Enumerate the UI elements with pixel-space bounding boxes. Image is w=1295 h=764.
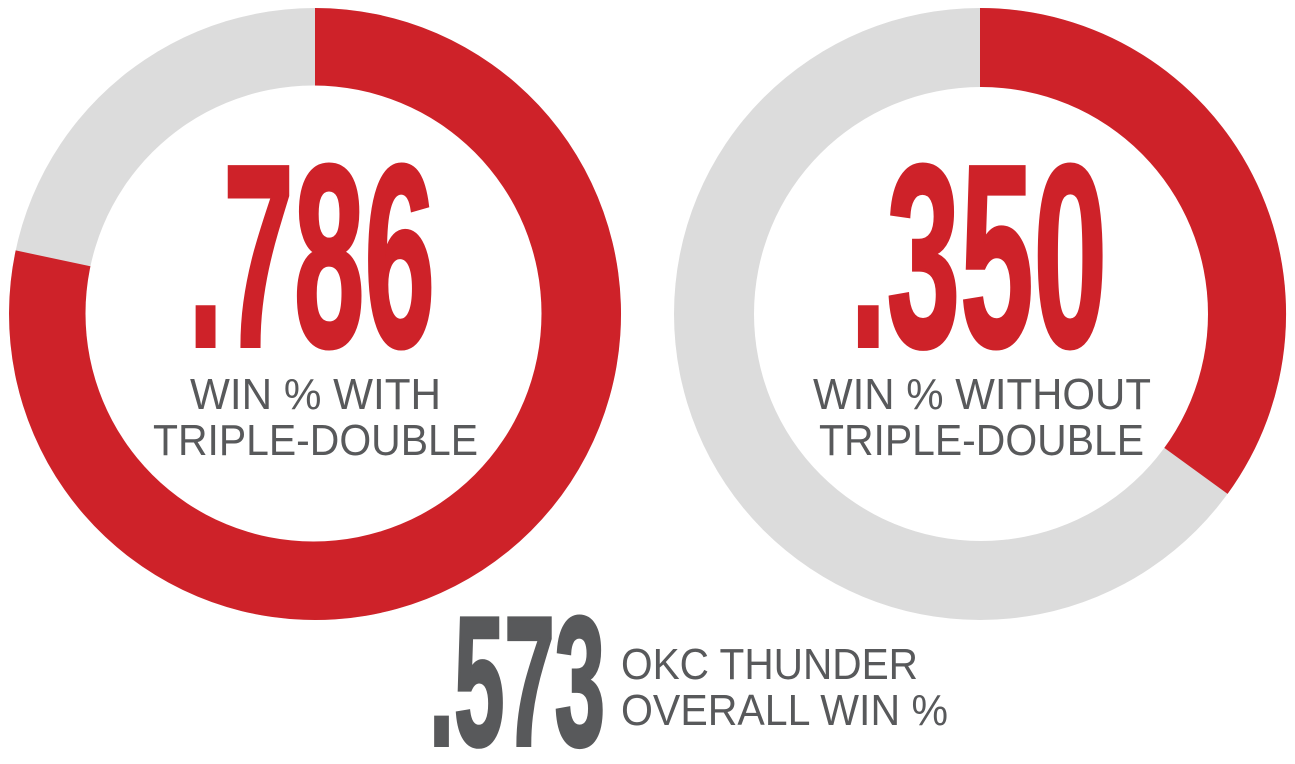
label: win % without triple-double: TRIPLE-DOUBLE — [819, 416, 1144, 465]
label: okc thunder overall win % — [621, 640, 948, 735]
label: win % with triple-double: TRIPLE-DOUBLE — [153, 416, 478, 465]
panel: win percentage with triple-double — [9, 8, 621, 620]
donut chart: .350 — [674, 8, 1286, 620]
donut chart: .786 — [9, 8, 621, 620]
label: okc thunder overall win %: OKC THUNDER — [621, 640, 918, 689]
panel: win percentage without triple-double — [674, 8, 1286, 620]
panel: win percentage with triple-double: .786 — [188, 112, 435, 402]
label: win % with triple-double: WIN % WITH — [190, 370, 441, 419]
label: win % with triple-double — [153, 370, 478, 465]
label: win % without triple-double: WIN % WITHOUT — [813, 370, 1151, 419]
label: win % without triple-double — [813, 370, 1151, 465]
label: okc thunder overall win %: OVERALL WIN % — [621, 686, 948, 735]
panel: overall win percentage — [429, 578, 948, 764]
